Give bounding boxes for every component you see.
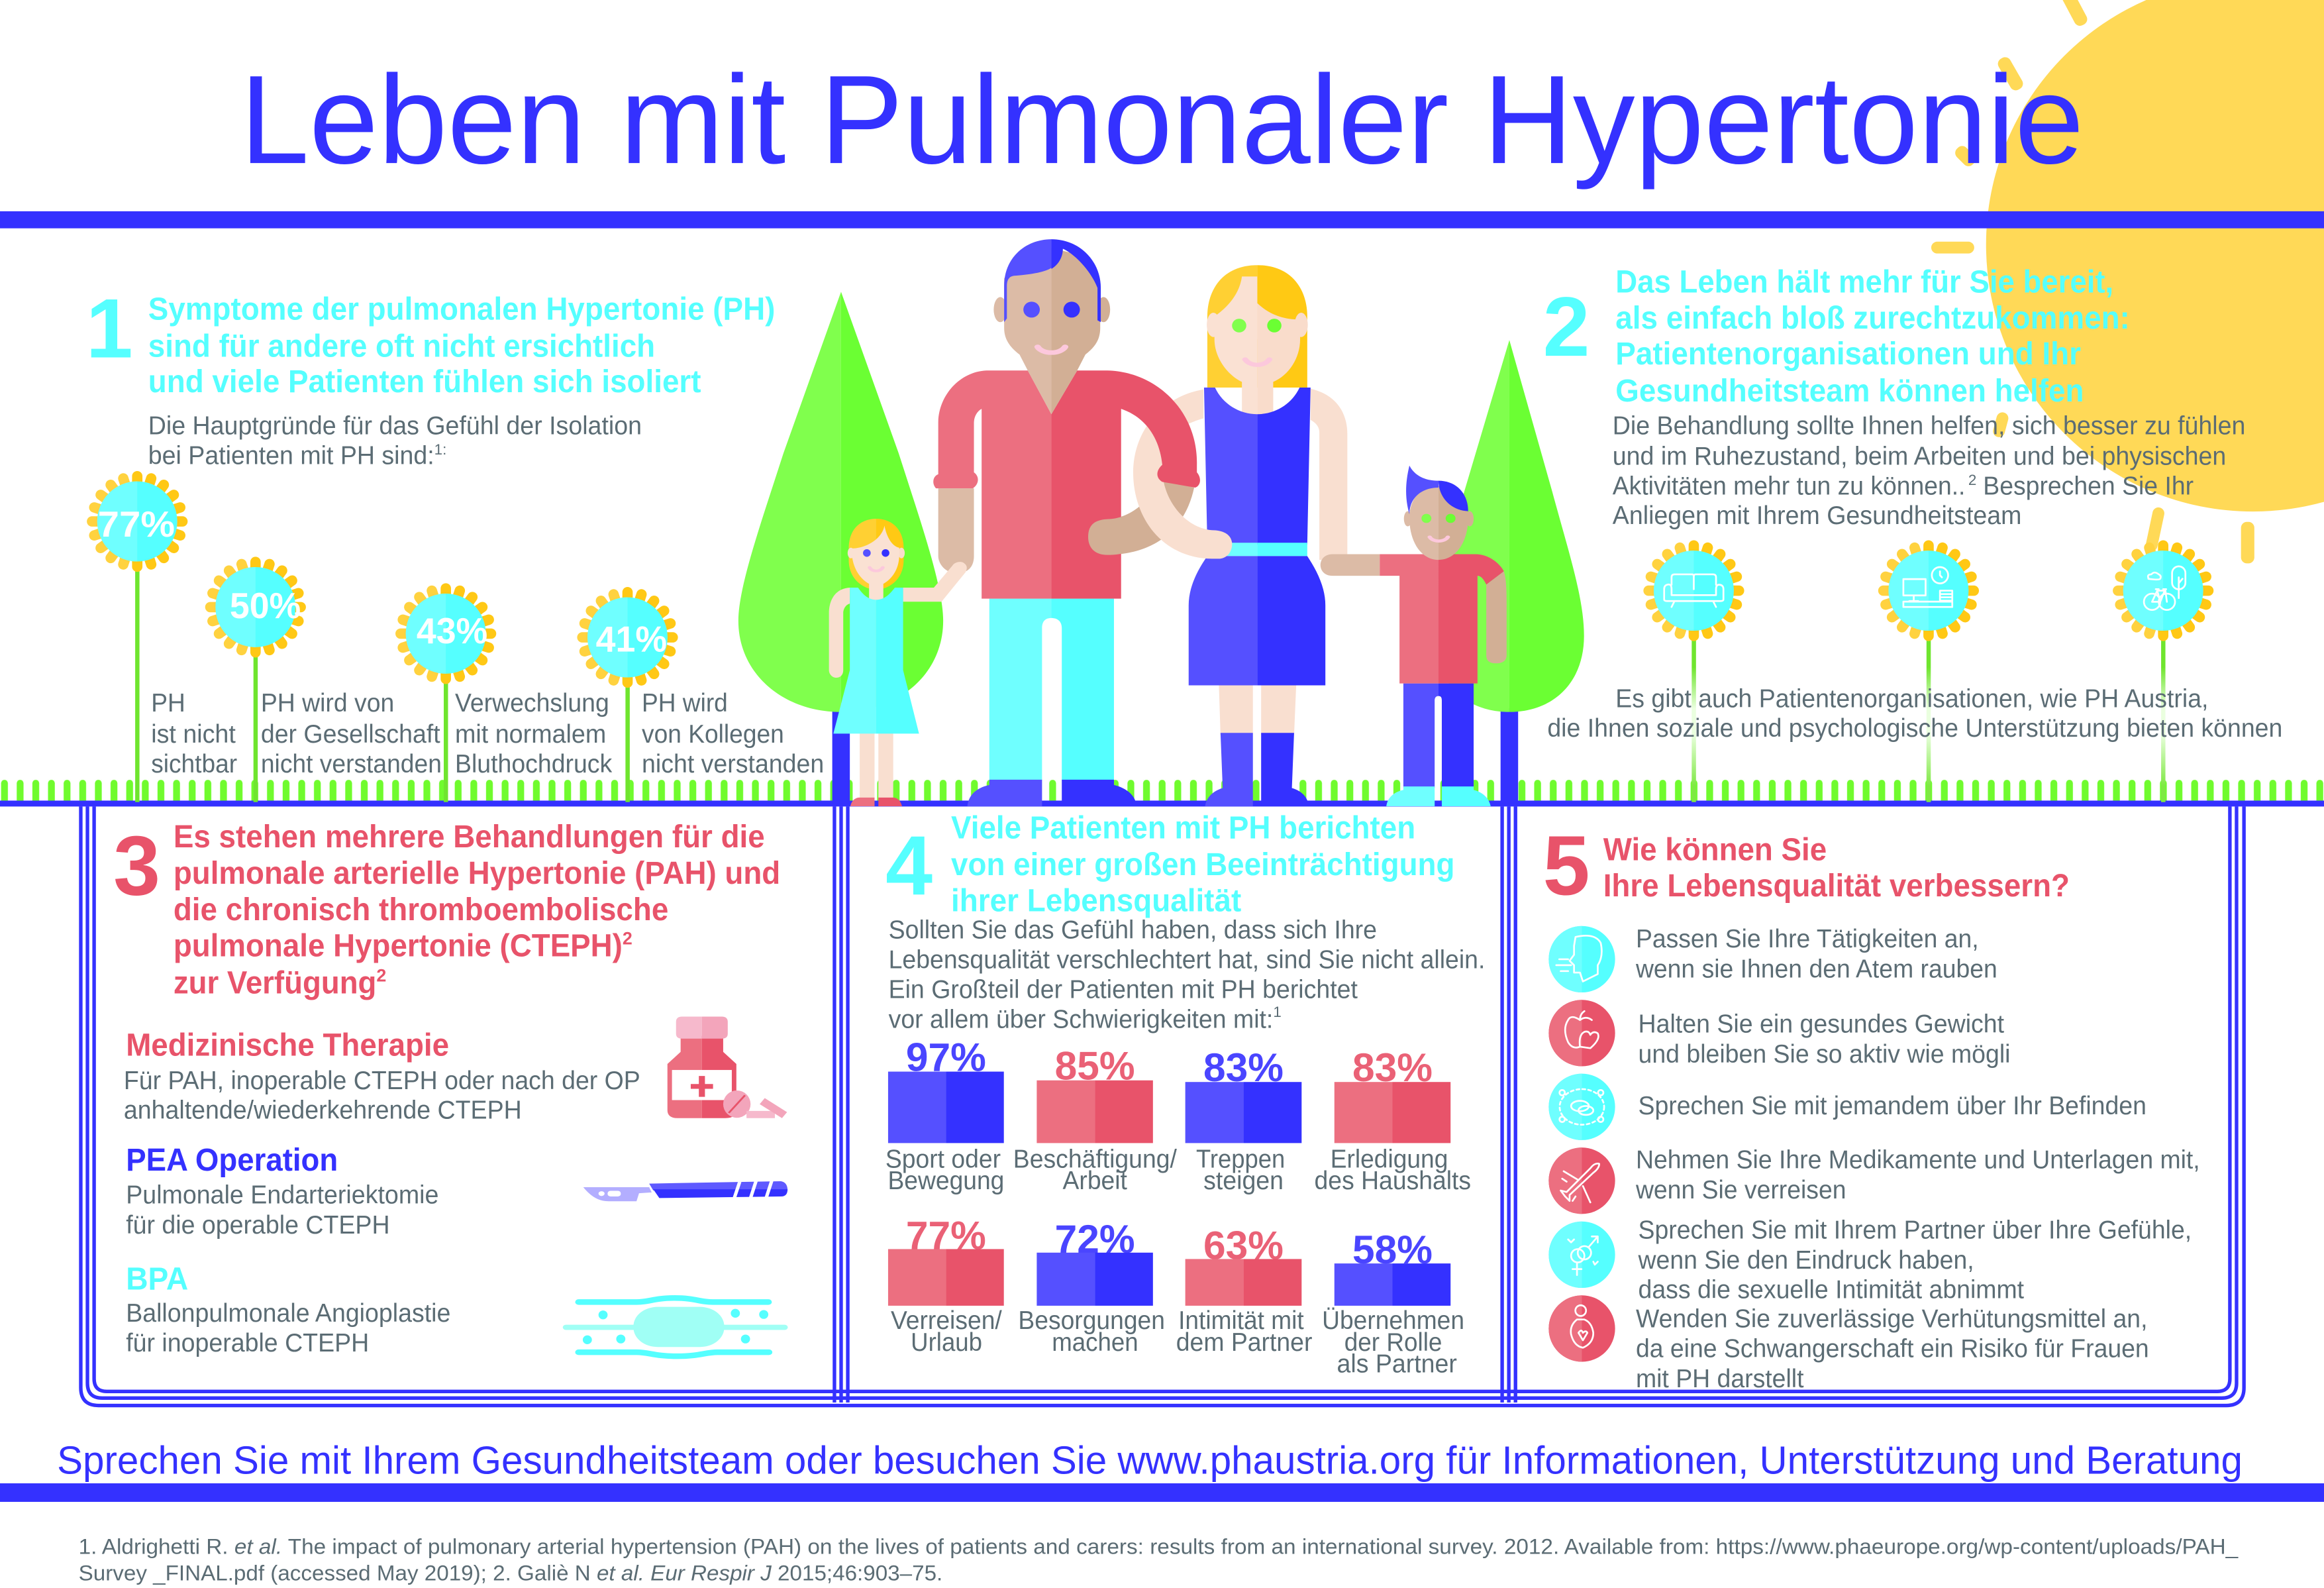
- references: 1. Aldrighetti R. et al. The impact of pulmonary arterial hypertension (PAH) on the lives of patients and carers: results from an international survey. 2012. Available from: https://www.phaeurope.org/wp-content/uploads/PAH_: [79, 1534, 2239, 1558]
- section 3 heading: die chronisch thromboembolische: [174, 892, 668, 927]
- flower caption: not visible: PH: [151, 689, 185, 717]
- flower: 50%: 50%: [230, 585, 301, 626]
- section 4 body text: Lebensqualität verschlechtert hat, sind Sie nicht allein.: [889, 945, 1485, 974]
- section 2 heading: Das Leben hält mehr für Sie bereit,: [1615, 264, 2113, 299]
- bar: work 85%: Beschäftigung/: [1013, 1145, 1177, 1173]
- references: Survey _FINAL.pdf (accessed May 2019); 2. Galiè N et al. Eur Respir J 2015;46:903–75.: [79, 1562, 942, 1585]
- section 4 body text: Ein Großteil der Patienten mit PH berichtet: [889, 976, 1358, 1004]
- flower caption: society: der Gesellschaft: [261, 720, 440, 749]
- bar: intimacy 63%: Intimität mit: [1178, 1306, 1304, 1335]
- bar: travel 77%: 77%: [906, 1212, 986, 1257]
- tip: healthy weight: Halten Sie ein gesundes Gewicht: [1639, 1010, 2004, 1039]
- flower: 43%: [395, 583, 496, 802]
- section 5 heading: Ihre Lebensqualität verbessern?: [1603, 869, 2070, 904]
- bar: partner role 58%: 58%: [1352, 1227, 1433, 1272]
- bar: partner role 58%: Übernehmen: [1322, 1306, 1464, 1335]
- man's hand: [1088, 509, 1151, 555]
- flower caption: confusion: mit normalem: [455, 720, 606, 749]
- bar: travel 77%: Verreisen/: [891, 1306, 1002, 1335]
- flower: 77%: [87, 471, 187, 802]
- panel 3: treatments: [113, 820, 787, 1357]
- section 2 body text: und im Ruhezustand, beim Arbeiten und bei physischen: [1613, 443, 2226, 471]
- treatment: BPA: BPA: [126, 1261, 188, 1297]
- illustration: family and trees: [738, 239, 1584, 806]
- treatment: PEA operation: [126, 1143, 438, 1240]
- section 3 heading: [174, 820, 780, 1000]
- section 1 intro text: [148, 412, 642, 470]
- treatment: BPA: [126, 1261, 450, 1357]
- icon: gender symbols: [1548, 1222, 1615, 1288]
- treatment: BPA: Ballonpulmonale Angioplastie: [126, 1299, 450, 1328]
- section 5 heading: Wie können Sie: [1603, 832, 1827, 867]
- section 1 heading: [148, 291, 775, 399]
- section 1 heading: und viele Patienten fühlen sich isoliert: [148, 364, 701, 399]
- bar: travel 77%: [888, 1212, 1004, 1357]
- flower caption: society: PH wird von: [261, 689, 394, 717]
- girl: [829, 519, 967, 806]
- tip: talk about feelings: Sprechen Sie mit jemandem über Ihr Befinden: [1639, 1092, 2147, 1120]
- section 3 heading: Es stehen mehrere Behandlungen für die: [174, 820, 765, 855]
- section 2 heading: Gesundheitsteam können helfen: [1615, 374, 2084, 409]
- treatment: BPA: für inoperable CTEPH: [126, 1329, 369, 1357]
- section 1 heading: sind für andere oft nicht ersichtlich: [148, 329, 655, 364]
- bar: work 85%: Arbeit: [1063, 1167, 1127, 1195]
- tip: healthy weight: und bleiben Sie so aktiv wie mögli: [1639, 1040, 2010, 1069]
- bar: stairs 83%: steigen: [1203, 1167, 1284, 1195]
- section 5 heading: [1603, 832, 2070, 904]
- section 2 heading: als einfach bloß zurechtzukommen:: [1615, 301, 2130, 336]
- section 3 heading: pulmonale arterielle Hypertonie (PAH) und: [174, 856, 780, 891]
- section number 3: 3: [113, 820, 160, 914]
- tip: adapt activities: wenn sie Ihnen den Atem rauben: [1635, 955, 1997, 984]
- flower: 50%: [205, 556, 306, 802]
- right tree: [1435, 340, 1584, 803]
- tip: talk with partner: dass die sexuelle Intimität abnimmt: [1639, 1275, 2024, 1304]
- bar: intimacy 63%: dem Partner: [1176, 1328, 1313, 1357]
- section 4 body text: Sollten Sie das Gefühl haben, dass sich Ihre: [889, 916, 1377, 945]
- section 1: symptoms: [86, 282, 824, 802]
- section 1 heading: Symptome der pulmonalen Hypertonie (PH): [148, 291, 775, 327]
- icon: apple and heart: [1548, 1000, 1615, 1066]
- section 3 heading: 2: [623, 929, 632, 949]
- section 1 intro text: bei Patienten mit PH sind:: [148, 441, 434, 470]
- bar: stairs 83%: [1186, 1045, 1301, 1195]
- bar: intimacy 63%: 63%: [1203, 1222, 1284, 1267]
- bar: sport 97%: Sport oder: [885, 1145, 1001, 1173]
- tip: talk with partner: Sprechen Sie mit Ihrem Partner über Ihre Gefühle,: [1639, 1216, 2192, 1245]
- bar: partner role 58%: als Partner: [1337, 1350, 1457, 1378]
- tip: travel medication: [1635, 1145, 2200, 1204]
- section 2 heading: [1615, 264, 2130, 409]
- tip: healthy weight: [1639, 1010, 2010, 1069]
- section 2 body text: Aktivitäten mehr tun zu können..: [1613, 472, 1965, 500]
- patient organisations text: die Ihnen soziale und psychologische Unterstützung bieten können: [1547, 714, 2282, 743]
- section 2 body text: [1613, 412, 2245, 530]
- treatment: PEA operation: für die operable CTEPH: [126, 1211, 390, 1240]
- flower: 41%: [577, 587, 678, 802]
- bar: household 83%: des Haushalts: [1315, 1167, 1471, 1195]
- flower caption: confusion: Verwechslung: [455, 689, 609, 717]
- section 4 heading: von einer großen Beeinträchtigung: [951, 847, 1454, 882]
- bar: stairs 83%: Treppen: [1196, 1145, 1285, 1173]
- treatment: medical therapy: anhaltende/wiederkehrende CTEPH: [124, 1096, 522, 1124]
- tip: contraception: Wenden Sie zuverlässige Verhütungsmittel an,: [1636, 1305, 2147, 1334]
- flower caption: colleagues: PH wird: [642, 689, 728, 717]
- icon: balloon angioplasty: [566, 1298, 785, 1356]
- bar: errands 72%: Besorgungen: [1018, 1306, 1165, 1335]
- tip: adapt activities: Passen Sie Ihre Tätigkeiten an,: [1636, 925, 1979, 953]
- flower caption: colleagues: [642, 689, 824, 778]
- section 2: life offers more: [1543, 264, 2282, 802]
- section number 1: 1: [86, 282, 133, 376]
- panel 4: quality of life: [885, 810, 1485, 1378]
- section 4 heading: Viele Patienten mit PH berichten: [951, 810, 1415, 845]
- tip: travel medication: wenn Sie verreisen: [1635, 1176, 1846, 1204]
- flower: 41%: 41%: [596, 619, 667, 660]
- woman: [1133, 265, 1347, 806]
- tip: talk with partner: [1638, 1216, 2192, 1304]
- treatment: medical therapy: Medizinische Therapie: [126, 1028, 449, 1063]
- title: Leben mit Pulmonaler Hypertonie: [240, 50, 2084, 190]
- flower caption: not visible: ist nicht: [151, 720, 236, 749]
- flower caption: confusion: [455, 689, 613, 778]
- bar: errands 72%: 72%: [1055, 1216, 1135, 1261]
- section 2 body text: Besprechen Sie Ihr: [1983, 472, 2194, 500]
- icon: pregnancy: [1548, 1295, 1615, 1361]
- bar: errands 72%: [1018, 1216, 1165, 1357]
- man: [933, 239, 1200, 806]
- bar: household 83%: [1315, 1045, 1471, 1195]
- patient organisations text: Es gibt auch Patientenorganisationen, wie PH Austria,: [1615, 684, 2208, 713]
- section 2 body text: Die Behandlung sollte Ihnen helfen, sich besser zu fühlen: [1613, 412, 2245, 441]
- bar: household 83%: 83%: [1352, 1045, 1433, 1090]
- icon: scalpel: [583, 1181, 787, 1201]
- treatment: medical therapy: Für PAH, inoperable CTEPH oder nach der OP: [124, 1067, 640, 1095]
- icon: group conversation: [1548, 1074, 1615, 1140]
- section 3 heading: pulmonale Hypertonie (CTEPH): [174, 928, 623, 963]
- bar: work 85%: [1013, 1043, 1177, 1195]
- sun: [1931, 0, 2324, 563]
- bar: travel 77%: Urlaub: [911, 1328, 982, 1357]
- left tree: [738, 291, 943, 803]
- flower caption: society: [261, 689, 442, 778]
- flower caption: society: nicht verstanden: [261, 750, 442, 778]
- bottom divider bar: [0, 1483, 2324, 1502]
- bar: partner role 58%: [1322, 1227, 1464, 1378]
- section 2 heading: Patientenorganisationen und Ihr: [1615, 337, 2081, 372]
- section 1 intro text: Die Hauptgründe für das Gefühl der Isolation: [148, 412, 642, 441]
- section 3 heading: zur Verfügung: [174, 965, 376, 1000]
- bar: errands 72%: machen: [1052, 1328, 1138, 1357]
- bar: intimacy 63%: [1176, 1222, 1313, 1357]
- flower caption: colleagues: von Kollegen: [642, 720, 784, 749]
- patient organisations text: [1547, 684, 2282, 743]
- flower icon: desk: [1878, 540, 1979, 802]
- bar: household 83%: Erledigung: [1331, 1145, 1448, 1173]
- grass strip: [0, 780, 2324, 802]
- tip: contraception: mit PH darstellt: [1636, 1365, 1804, 1393]
- section number 4: 4: [885, 820, 933, 914]
- top divider bar: [0, 211, 2324, 229]
- bar: stairs 83%: 83%: [1203, 1045, 1284, 1090]
- section number 2: 2: [1543, 280, 1590, 374]
- panel 5: how to improve: [1543, 820, 2200, 1393]
- bar: sport 97%: [885, 1034, 1004, 1195]
- icon: breathing head: [1548, 926, 1615, 992]
- section 2 body text: Anliegen mit Ihrem Gesundheitsteam: [1613, 502, 2021, 530]
- section 4 body text: 1: [1273, 1004, 1282, 1020]
- bar chart: difficulties: [885, 1034, 1471, 1378]
- tip: adapt activities: [1635, 925, 1997, 984]
- tip: contraception: [1636, 1305, 2149, 1393]
- ground line: [0, 800, 2324, 806]
- section number 5: 5: [1543, 820, 1590, 914]
- flower: 43%: 43%: [417, 610, 487, 651]
- flower: 77%: 77%: [98, 503, 175, 545]
- treatment: PEA operation: PEA Operation: [126, 1143, 338, 1178]
- bar: work 85%: 85%: [1055, 1043, 1135, 1088]
- section 3 heading: 2: [376, 965, 386, 985]
- bar: sport 97%: Bewegung: [887, 1167, 1004, 1195]
- man's forearm: [1088, 480, 1194, 555]
- flower caption: colleagues: nicht verstanden: [642, 750, 824, 778]
- flower caption: not visible: [151, 689, 237, 778]
- tip: contraception: da eine Schwangerschaft ein Risiko für Frauen: [1636, 1334, 2149, 1363]
- bar: sport 97%: 97%: [906, 1034, 986, 1079]
- section 4 heading: [951, 810, 1454, 919]
- tip: talk with partner: wenn Sie den Eindruck haben,: [1638, 1246, 1974, 1275]
- panel frames: [81, 806, 2244, 1406]
- flower icon: bicycle: [2113, 540, 2213, 802]
- references: [79, 1534, 2239, 1585]
- treatment: PEA operation: Pulmonale Endarteriektomie: [126, 1181, 438, 1210]
- flower caption: confusion: Bluthochdruck: [455, 750, 613, 778]
- boy: [1321, 466, 1507, 806]
- section 4 body text: [889, 916, 1485, 1034]
- section 4 body text: vor allem über Schwierigkeiten mit:: [889, 1006, 1273, 1034]
- section 2 body text: 2: [1968, 472, 1976, 488]
- section 4 heading: ihrer Lebensqualität: [951, 884, 1241, 919]
- call to action: Sprechen Sie mit Ihrem Gesundheitsteam oder besuchen Sie www.phaustria.org für Informationen, Unterstützung und Beratung: [57, 1438, 2243, 1482]
- flower caption: not visible: sichtbar: [151, 750, 237, 778]
- tip: travel medication: Nehmen Sie Ihre Medikamente und Unterlagen mit,: [1636, 1145, 2200, 1174]
- treatment: medical therapy: [124, 1028, 640, 1124]
- section 1 intro text: 1:: [434, 441, 446, 458]
- flower icon: sofa: [1643, 540, 1744, 802]
- icon: airplane: [1548, 1147, 1615, 1214]
- icon: pill bottle: [668, 1016, 787, 1118]
- bar: partner role 58%: der Rolle: [1344, 1328, 1442, 1357]
